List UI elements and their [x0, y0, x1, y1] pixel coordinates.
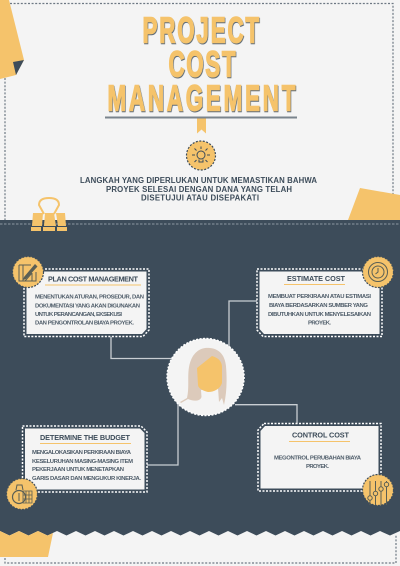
panel: plan cost management: [24, 269, 149, 336]
icon: clock with arrows: [362, 256, 394, 288]
yellow paper corner, bottom left: [0, 531, 53, 557]
description text: [80, 176, 317, 202]
title: MANAGEMENT: [108, 79, 295, 119]
panel top stitching: [0, 223, 400, 225]
connector lines: [111, 301, 297, 465]
body: control cost: PROYEK.: [306, 464, 329, 470]
body: estimate cost: PROYEK.: [308, 320, 331, 326]
panel: control cost: [258, 424, 381, 491]
body: plan cost management: UNTUK PERANCANGAN, EKSEKUSI: [35, 312, 122, 318]
heading: determine the budget: DETERMINE THE BUDGET: [40, 433, 131, 442]
title: PROJECT: [142, 11, 259, 51]
dashed page border, top: [5, 4, 393, 220]
ribbon: top-left folded: [0, 0, 24, 79]
body: estimate cost: DIBUTUHKAN UNTUK MENYELESAIKAN: [268, 312, 371, 318]
title: COST: [168, 45, 235, 85]
panel: estimate cost: [257, 269, 382, 336]
body: plan cost management: DAN PENGONTROLAN BIAYA PROYEK.: [35, 320, 134, 326]
body: determine the budget: MENGALOKASIKAN PERKIRAAN BIAYA: [32, 450, 132, 456]
panel: determine the budget: [22, 426, 147, 492]
icon: light bulb: [186, 141, 216, 170]
body: plan cost management: [35, 294, 144, 326]
hair: [180, 348, 227, 405]
central portrait: [167, 338, 244, 416]
body: estimate cost: [268, 294, 371, 326]
icon: binder clip: [31, 198, 67, 231]
heading: control cost: CONTROL COST: [292, 430, 350, 440]
body: control cost: MEGONTROL PERUBAHAN BIAYA: [274, 456, 362, 462]
body: control cost: [274, 456, 362, 470]
icon: money bag and calculator: [6, 478, 38, 510]
heading: estimate cost: ESTIMATE COST: [287, 274, 346, 283]
title: [108, 11, 295, 119]
face: [197, 356, 222, 392]
icon: blueprint and pencil: [12, 256, 44, 288]
body: determine the budget: GARIS DASAR DAN MENGUKUR KINERJA.: [32, 476, 141, 482]
description text: DISETUJUI ATAU DISEPAKATI: [141, 194, 259, 202]
body: estimate cost: BIAYA BERDASARKAN SUMBER YANG: [269, 303, 368, 309]
body: estimate cost: MEMBUAT PERKIRAAN ATAU ESTIMASI: [268, 294, 371, 300]
dark main panel: [0, 220, 400, 536]
body: determine the budget: KESELURUHAN MASING-MASING ITEM: [32, 459, 133, 465]
body: determine the budget: PEKERJAAN UNTUK MENETAPKAN: [32, 467, 124, 473]
heading: plan cost management: PLAN COST MANAGEMENT: [48, 274, 139, 284]
description text: LANGKAH YANG DIPERLUKAN UNTUK MEMASTIKAN BAHWA: [80, 176, 317, 185]
body: determine the budget: [32, 450, 141, 482]
dashed page border, bottom: [5, 535, 396, 563]
yellow paper corner, right: [348, 188, 400, 220]
title underline with bookmark: [105, 116, 297, 134]
body: plan cost management: MENENTUKAN ATURAN, PROSEDUR, DAN: [35, 294, 144, 300]
body: plan cost management: DOKUMENTASI YANG AKAN DIGUNAKAN: [35, 304, 140, 310]
description text: PROYEK SELESAI DENGAN DANA YANG TELAH: [106, 185, 292, 194]
icon: sliders: [362, 474, 394, 506]
